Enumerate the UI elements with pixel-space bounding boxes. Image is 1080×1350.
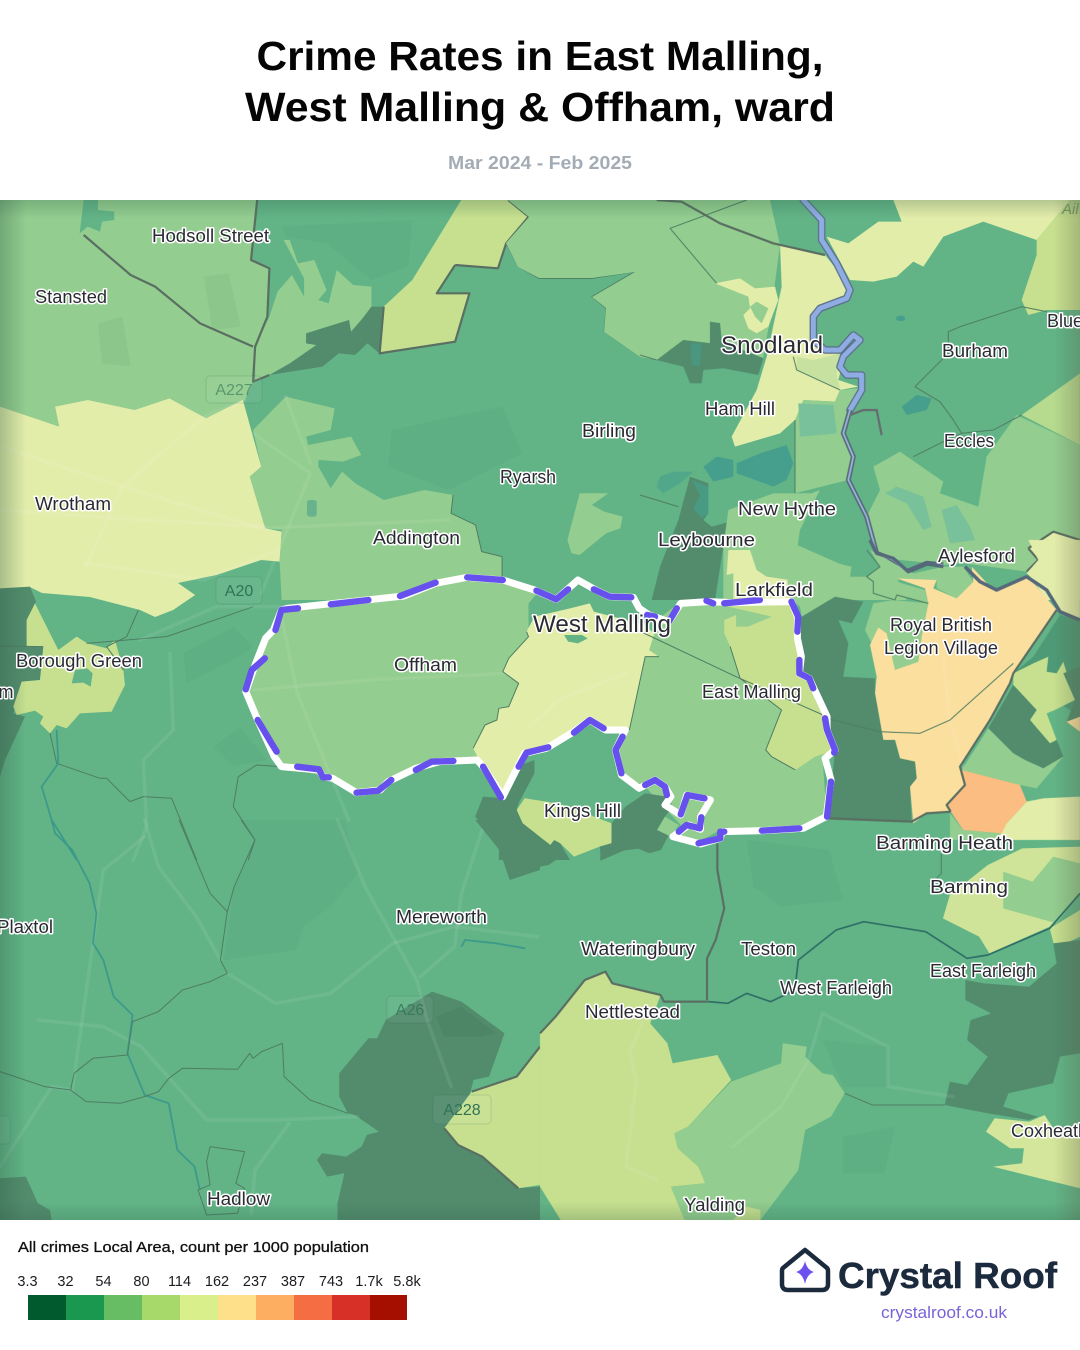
legend scale values: 387 [281, 1274, 305, 1290]
legend scale values: 5.8k [393, 1274, 421, 1290]
place labels: Stansted [35, 287, 107, 307]
road shields: A20 [225, 583, 253, 600]
legend scale values: 237 [243, 1274, 267, 1290]
map areas: Borough Green and west [0, 587, 280, 860]
legend scale values: 743 [319, 1274, 343, 1290]
place labels: Royal British [890, 615, 992, 635]
title: West Malling & Offham, ward [245, 84, 835, 130]
title: Crime Rates in East Malling, [256, 33, 824, 79]
title [245, 33, 835, 130]
map areas: ward interior [246, 578, 835, 860]
legend title: All crimes Local Area, count per 1000 population [18, 1240, 369, 1256]
place labels: Nettlestead [585, 1002, 680, 1022]
place labels: Eccles [944, 431, 994, 451]
legend colour bar [28, 1295, 407, 1320]
legend scale values [17, 1274, 421, 1290]
place labels: Wrotham [35, 494, 111, 514]
place labels: Ryarsh [500, 467, 556, 487]
place labels: Barming [930, 877, 1008, 897]
ward boundary: East Malling, West Malling & Offham [246, 577, 835, 844]
logo wordmark: Crystal Roof [838, 1255, 1058, 1296]
place labels: East Farleigh [930, 961, 1036, 981]
place labels: Burham [942, 341, 1008, 361]
place labels: Leybourne [658, 530, 755, 550]
place labels: Addington [373, 528, 460, 548]
map areas: north centre (light green strip) [506, 200, 780, 360]
road shields: A227 [215, 382, 253, 399]
place labels: Mereworth [396, 907, 487, 927]
place labels: Offham [394, 655, 457, 675]
subtitle: date range: Mar 2024 - Feb 2025 [448, 153, 632, 173]
place labels: Ail [1061, 201, 1079, 218]
place labels: Ham Hill [705, 399, 775, 419]
place labels: Barming Heath [876, 833, 1013, 853]
road shields: A26 [396, 1002, 424, 1019]
place labels: Hodsoll Street [152, 226, 269, 246]
place labels: Teston [741, 939, 796, 959]
place labels [0, 201, 1080, 1215]
place labels: Legion Village [884, 638, 998, 658]
icon: Crystal Roof house logo [782, 1250, 828, 1290]
map edge vignette [0, 200, 1080, 1220]
legend scale values: 80 [133, 1274, 150, 1290]
legend scale values: 3.3 [17, 1274, 38, 1290]
map areas: south-east [540, 817, 1080, 1220]
legend scale values: 1.7k [355, 1274, 383, 1290]
map areas: north-west [0, 200, 640, 617]
place labels: Hadlow [207, 1189, 271, 1209]
legend scale values: 162 [205, 1274, 229, 1290]
place labels: Birling [582, 421, 636, 441]
legend scale values: 54 [95, 1274, 112, 1290]
place labels: Snodland [721, 332, 823, 359]
map areas: south-west [0, 820, 540, 1220]
place labels: Kings Hill [544, 801, 621, 821]
legend scale values: 114 [168, 1274, 191, 1290]
road shields: A228 [443, 1102, 481, 1119]
place labels: Larkfield [735, 580, 813, 600]
place labels: West Farleigh [780, 978, 892, 998]
road shields [0, 376, 491, 1144]
place labels: West Malling [533, 611, 671, 638]
choropleth map [0, 200, 1080, 1220]
place labels: Wateringbury [581, 939, 695, 959]
website link: crystalroof.co.uk [881, 1304, 1008, 1322]
map areas: Royal British Legion Village and east [780, 540, 1080, 840]
place labels: Aylesford [938, 546, 1015, 566]
map areas: Snodland, Burham and Aylesford [640, 200, 1080, 600]
legend scale values: 32 [57, 1274, 74, 1290]
place labels: Yalding [684, 1195, 745, 1215]
place labels: Borough Green [16, 651, 142, 671]
place labels: East Malling [702, 682, 801, 702]
place labels: New Hythe [738, 499, 836, 519]
